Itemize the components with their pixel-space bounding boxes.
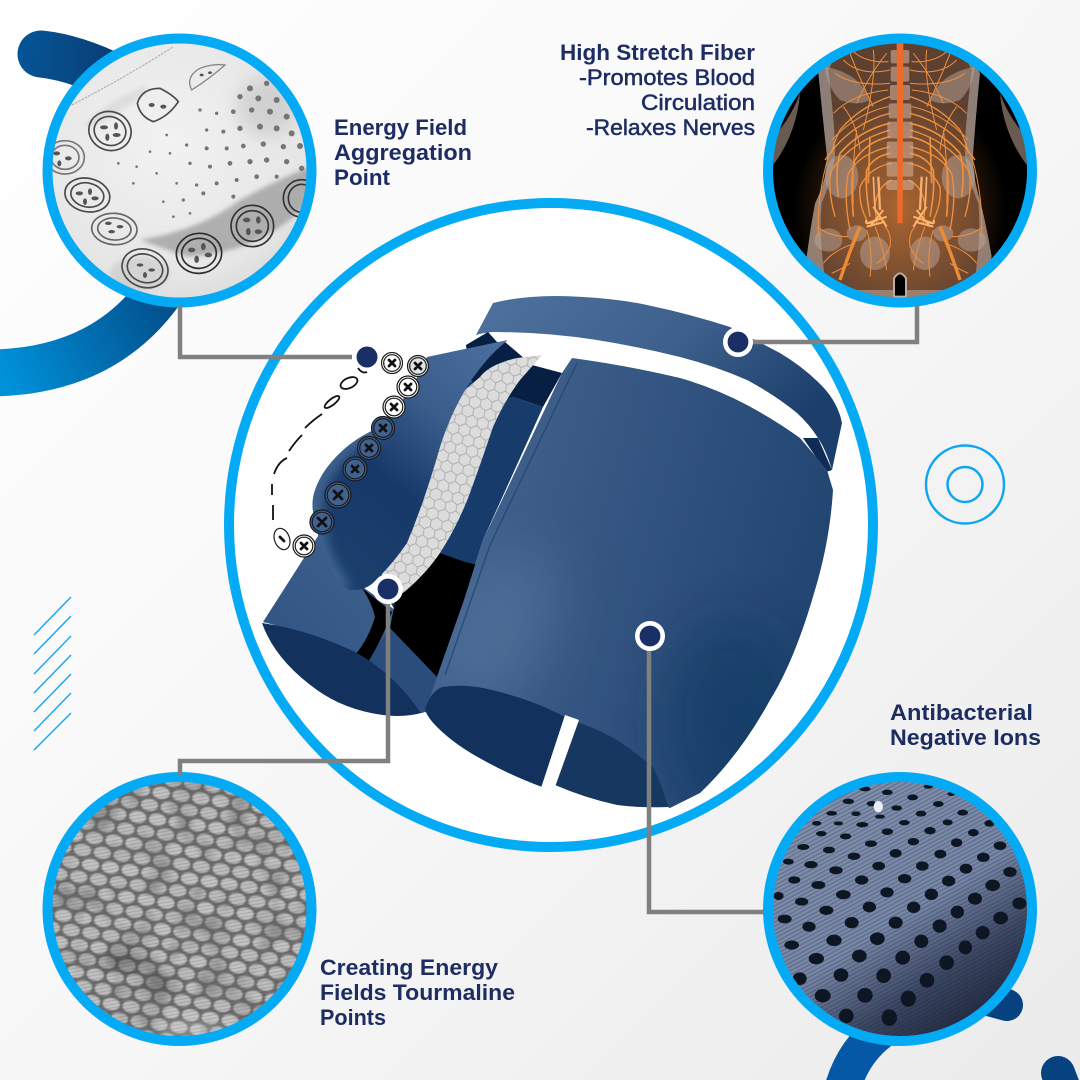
button holes bbox=[53, 71, 262, 278]
left leg inner panel bbox=[368, 628, 437, 712]
label: high stretch fiber: High Stretch Fiber bbox=[560, 40, 755, 65]
waistband inner dark left bbox=[466, 332, 562, 407]
front panel shading bbox=[444, 363, 794, 804]
fabric shadow bbox=[140, 167, 317, 257]
waistband inner end bbox=[803, 438, 832, 472]
orange glow bbox=[800, 105, 1000, 296]
label: high stretch fiber: -Promotes Blood bbox=[579, 65, 755, 90]
ring bbox=[768, 777, 1032, 1041]
spinal cord bbox=[897, 43, 903, 223]
connector: top left bbox=[180, 306, 352, 357]
ring bbox=[48, 38, 312, 302]
glint bbox=[874, 801, 883, 812]
button holes bbox=[280, 360, 421, 549]
stitched seam bbox=[72, 47, 173, 105]
label: creating energy fields tourmaline points: Points bbox=[320, 1005, 386, 1030]
ring bbox=[48, 777, 312, 1041]
front leg opening left bbox=[425, 686, 565, 787]
decorative arcs: bottom right bbox=[842, 995, 1072, 1080]
photo circle: energy field aggregation point bbox=[40, 30, 320, 310]
left leg bbox=[263, 525, 440, 712]
front leg opening right bbox=[555, 722, 668, 807]
vertebrae bbox=[886, 50, 914, 190]
gap between legs bbox=[894, 273, 906, 297]
label: high stretch fiber bbox=[560, 40, 755, 140]
marker dot: aggregation point bbox=[356, 346, 378, 368]
decorative arc: top left bbox=[0, 54, 168, 373]
main front panel bbox=[425, 358, 833, 808]
underwear illustration bbox=[262, 296, 842, 820]
black gusset strip bbox=[355, 588, 392, 662]
photo circle: perforated antibacterial fabric bbox=[760, 770, 1040, 1050]
label: energy field aggregation point: Point bbox=[334, 165, 391, 190]
printed buttons bbox=[46, 65, 320, 294]
photo circle: nerves in the lower back bbox=[760, 30, 1040, 310]
label: antibacterial negative ions bbox=[890, 700, 1041, 750]
perforation holes bbox=[774, 785, 1026, 1026]
decoration: diagonal hatch lines bbox=[34, 597, 71, 750]
pale hip and rib bones bbox=[814, 67, 986, 270]
label: creating energy fields tourmaline points bbox=[320, 955, 515, 1030]
connector: top right bbox=[750, 305, 917, 342]
embossed dots bbox=[117, 81, 304, 218]
marker dot: waistband bbox=[725, 329, 751, 355]
honeycomb lining bbox=[370, 355, 542, 593]
ring bbox=[768, 38, 1032, 302]
nerves right mirrored bbox=[908, 48, 983, 280]
label: high stretch fiber: Circulation bbox=[641, 90, 755, 115]
inner torso bbox=[821, 40, 979, 290]
fabric flap bbox=[312, 340, 508, 590]
label: energy field aggregation point: Aggregation bbox=[334, 140, 472, 165]
black inner shadow bbox=[390, 552, 478, 677]
label: creating energy fields tourmaline points: Creating Energy bbox=[320, 955, 499, 980]
main product circle bbox=[229, 203, 873, 847]
back waistband bbox=[476, 296, 842, 470]
label: high stretch fiber: -Relaxes Nerves bbox=[586, 115, 755, 140]
white slit bbox=[541, 715, 579, 788]
label: energy field aggregation point: Energy Field bbox=[334, 115, 467, 140]
connector: bottom right bbox=[649, 650, 764, 912]
photo circle: tourmaline honeycomb fabric bbox=[40, 770, 320, 1050]
connector: bottom left bbox=[180, 600, 388, 775]
left leg opening bbox=[262, 623, 425, 716]
label: antibacterial negative ions: Negative Ions bbox=[890, 725, 1041, 750]
label: energy field aggregation point bbox=[334, 115, 472, 190]
decoration: concentric target bbox=[926, 446, 1004, 524]
side arms bbox=[773, 93, 1027, 165]
marker dot: body bbox=[637, 623, 663, 649]
label: creating energy fields tourmaline points: Fields Tourmaline bbox=[320, 980, 515, 1005]
button icons bbox=[271, 352, 428, 557]
inner backing panel bbox=[370, 370, 543, 677]
marker dot: lining bbox=[375, 576, 401, 602]
label: antibacterial negative ions: Antibacterial bbox=[890, 700, 1033, 725]
torso silhouette bbox=[806, 63, 992, 298]
dashed energy path bbox=[272, 368, 367, 520]
nerves left bbox=[817, 48, 892, 280]
